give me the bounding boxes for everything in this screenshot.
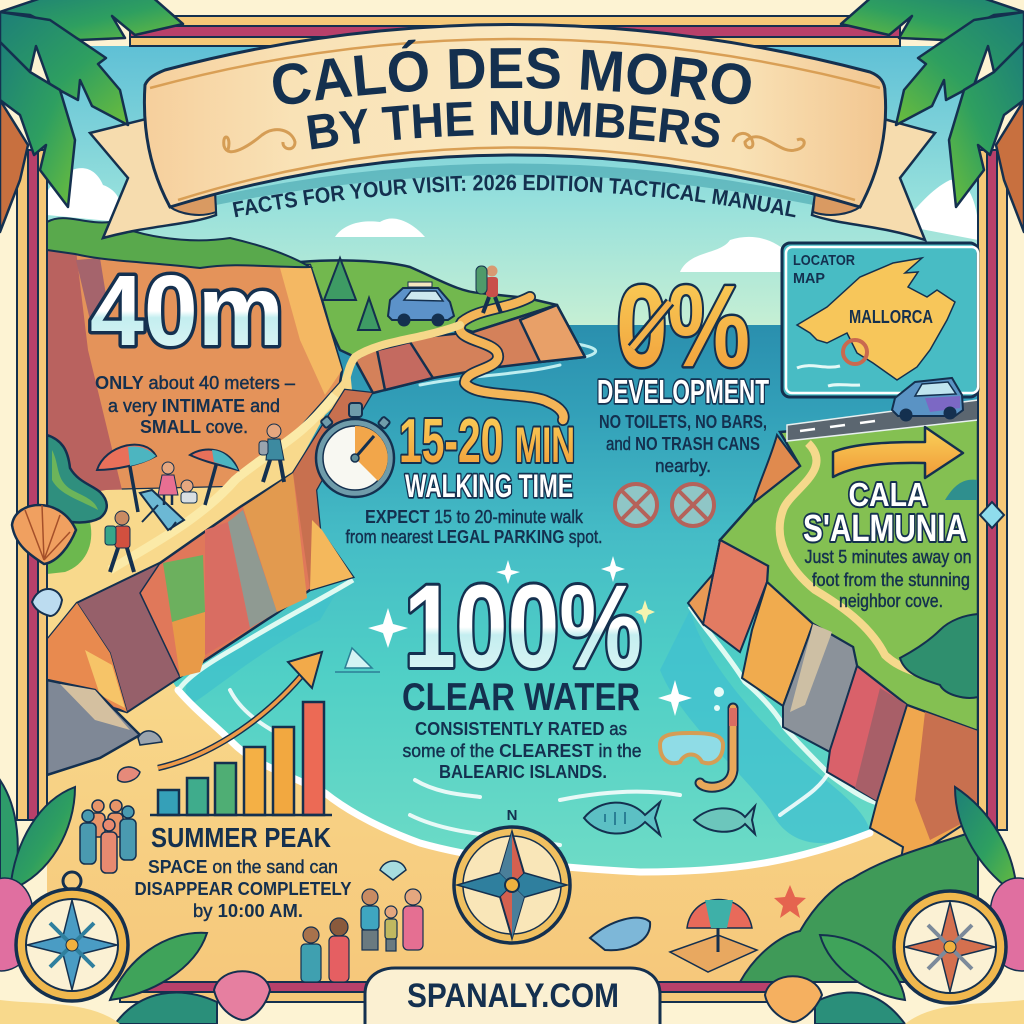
- locator map: MALLORCA: [849, 307, 933, 327]
- swirl right: [733, 133, 804, 151]
- family group: [361, 889, 423, 951]
- icon: conch: [590, 918, 650, 950]
- map label: LOCATOR: [793, 252, 855, 269]
- winding trail: [330, 297, 564, 420]
- left sand ledge: [47, 370, 352, 640]
- stat: walking time: from nearest LEGAL PARKING spot.: [346, 526, 602, 547]
- stat: summer peak: [134, 822, 352, 921]
- center compass: [454, 807, 570, 943]
- car by the map: [892, 378, 963, 422]
- stat: zero percent development: and NO TRASH CANS: [606, 433, 760, 454]
- stat: clear water: [402, 561, 642, 782]
- sand under left compass: [0, 1000, 120, 1024]
- swirl left: [224, 130, 295, 152]
- stat: walking time: 15-20 MIN: [399, 407, 575, 476]
- banner shadow: [170, 164, 860, 215]
- website pill: SPANALY.COM: [407, 977, 619, 1015]
- stat: clear water: CONSISTENTLY RATED as: [415, 718, 627, 739]
- path highlight: [110, 395, 335, 570]
- stat: summer peak: by 10:00 AM.: [193, 900, 303, 921]
- rocks: [47, 680, 162, 775]
- picnic scene: [97, 424, 284, 572]
- banner: [88, 23, 937, 242]
- locator map: MAP: [793, 270, 825, 287]
- website pill: [365, 968, 660, 1024]
- trees: [324, 258, 380, 330]
- icon: small shell left: [32, 589, 62, 616]
- arrow to Cala S'Almunia: [833, 427, 963, 478]
- stat: clear water: BALEARIC ISLANDS.: [439, 761, 607, 782]
- right cliff and plateau: [688, 415, 978, 866]
- center compass: N: [507, 807, 517, 824]
- stat: 40m: [90, 255, 296, 437]
- subtitle: FACTS FOR YOUR VISIT: 2026 EDITION TACTICAL MANUAL: [232, 174, 796, 218]
- icon: scallop bottom centre: [214, 971, 270, 1020]
- headland: [300, 260, 585, 393]
- flower left: [0, 878, 33, 971]
- left lower cliff: [47, 390, 372, 712]
- palm top left: [0, 0, 183, 232]
- flower right: [990, 878, 1024, 971]
- icon: no bins: [672, 484, 714, 526]
- right tail: [812, 118, 935, 240]
- stat: Cala S'Almunia: [803, 476, 972, 611]
- island: [797, 258, 955, 380]
- sky: [47, 46, 978, 326]
- stat: zero percent development: DEVELOPMENT: [597, 373, 769, 410]
- stat: Cala S'Almunia: S'ALMUNIA: [803, 508, 967, 550]
- icon: sailboat: [335, 648, 380, 672]
- stat: summer peak: SUMMER PEAK: [151, 822, 331, 853]
- stat: zero percent development: [597, 261, 769, 526]
- icon: shell on sand: [118, 767, 140, 782]
- icon: snorkel mask: [660, 687, 737, 787]
- left tail: [90, 118, 216, 238]
- stat: summer peak: DISAPPEAR COMPLETELY: [134, 878, 352, 899]
- title line two: BY THE NUMBERS: [307, 100, 720, 150]
- stat: 40m: 40m: [90, 255, 284, 367]
- car on headland: [388, 282, 454, 326]
- stat: Cala S'Almunia: CALA: [848, 476, 928, 513]
- stat: 40m: ONLY about 40 meters –: [95, 372, 296, 393]
- stat: walking time: [316, 403, 602, 547]
- stat: walking time: WALKING TIME: [405, 468, 573, 504]
- corner compass right: [894, 891, 1006, 1003]
- sand base: [47, 600, 978, 982]
- stat: walking time: EXPECT 15 to 20-minute walk: [365, 506, 584, 527]
- icon: no toilets: [615, 484, 657, 526]
- icon: diamond on frame: [980, 502, 1004, 528]
- hiker on headland: [476, 266, 501, 313]
- icon: starfish: [774, 885, 806, 918]
- locator map: [782, 243, 978, 397]
- road on plateau: [787, 400, 978, 441]
- leaves bottom left: [0, 780, 217, 1024]
- icon: stopwatch: [316, 403, 394, 497]
- leaves bottom right: [815, 787, 1017, 1024]
- icon: parasol and towel: [670, 900, 757, 972]
- stat: zero percent development: NO TOILETS, NO BARS,: [599, 411, 767, 432]
- sparkles: [368, 556, 692, 716]
- stat: 40m: SMALL cove.: [140, 416, 248, 437]
- sand under right compass: [905, 1000, 1024, 1024]
- stat: zero percent development: nearby.: [655, 455, 711, 476]
- stat: clear water: 100%: [404, 561, 642, 693]
- palm top right: [841, 0, 1024, 232]
- stat: summer peak: SPACE on the sand can: [148, 856, 338, 877]
- icon: scallop shell left: [12, 505, 76, 564]
- icon: small shell on beach: [380, 861, 406, 880]
- bushes left: [47, 435, 107, 574]
- stat: clear water: some of the CLEAREST in the: [402, 740, 642, 761]
- clouds: [47, 168, 978, 272]
- corner compass left: [16, 872, 128, 1001]
- icon: fish one: [584, 802, 660, 835]
- left upper cliff: [47, 218, 342, 500]
- couple: [301, 918, 349, 982]
- sea: [120, 325, 978, 872]
- stat: zero percent development: 0%: [616, 261, 750, 391]
- stat: 40m: a very INTIMATE and: [108, 395, 280, 416]
- crowd icon: [80, 800, 136, 873]
- bar chart: [150, 702, 332, 815]
- title: CALÓ DES MORO: [273, 40, 751, 104]
- water shading and foam: [178, 343, 878, 872]
- growth arrow: [158, 652, 322, 768]
- stat: Cala S'Almunia: neighbor cove.: [839, 590, 943, 611]
- bush lower right: [740, 830, 978, 982]
- stat: clear water: CLEAR WATER: [402, 676, 640, 719]
- banner body: [144, 24, 886, 207]
- stat: Cala S'Almunia: Just 5 minutes away on: [804, 546, 972, 567]
- icon: scallop bottom right: [765, 976, 822, 1022]
- stat: Cala S'Almunia: foot from the stunning: [812, 569, 970, 590]
- sand trail on plateau: [780, 443, 945, 680]
- right bushes: [900, 480, 978, 698]
- icon: fish two: [694, 806, 755, 834]
